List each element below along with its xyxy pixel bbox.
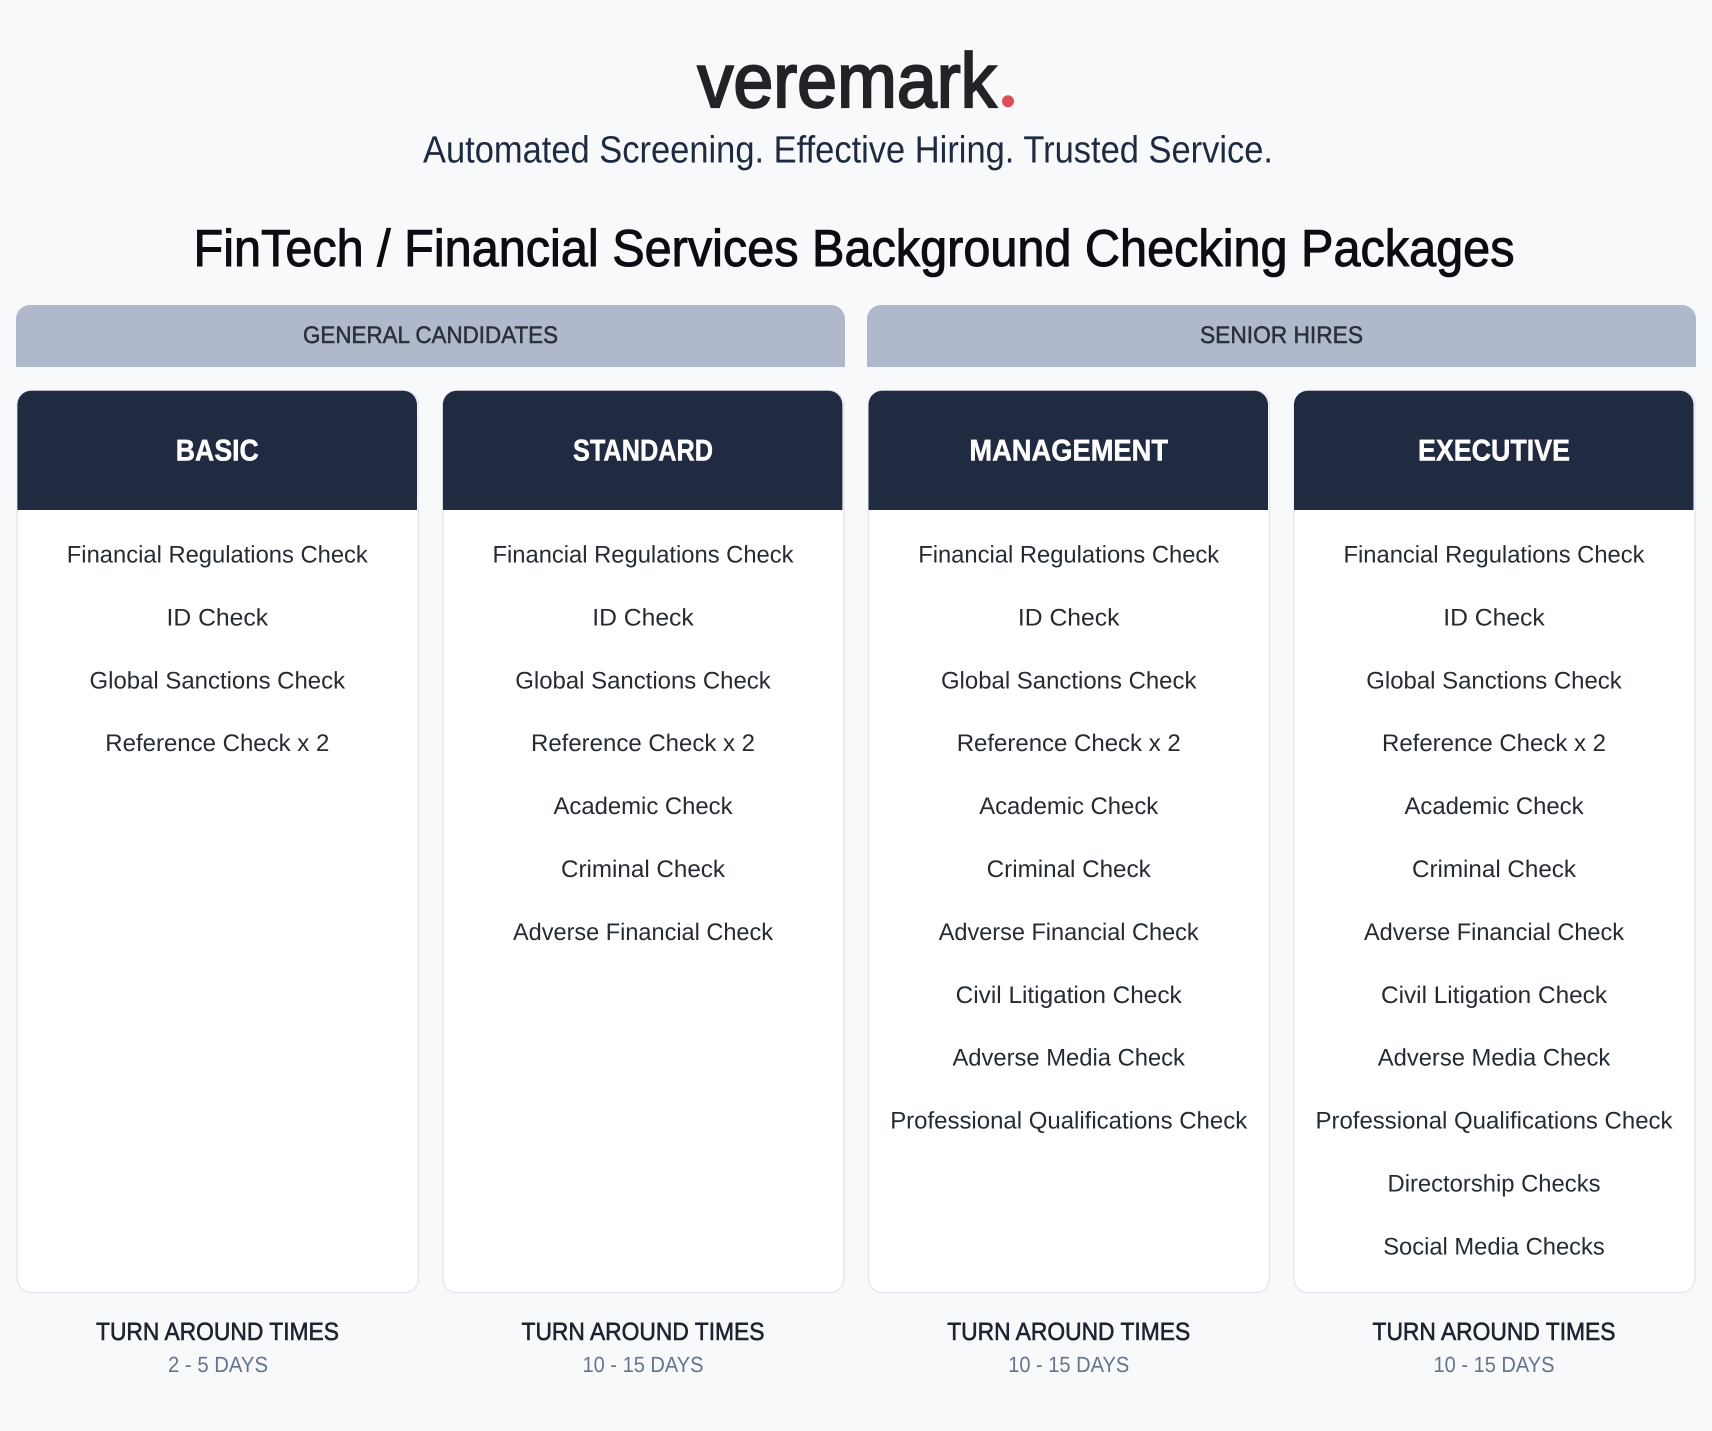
executive check list: Financial Regulations Check [1344,542,1645,568]
standard check list: Global Sanctions Check [515,667,772,694]
executive check list: ID Check [1443,604,1546,631]
banner: general candidates: GENERAL CANDIDATES [303,322,558,349]
panel: executive package [1294,391,1695,1293]
banner: senior hires [867,305,1696,367]
turnaround: standard [522,1318,764,1377]
standard check list: Academic Check [554,793,733,820]
basic check list: Financial Regulations Check [67,542,369,568]
executive check list: Criminal Check [1412,856,1577,883]
turnaround: executive [1372,1318,1616,1377]
basic header [17,391,417,510]
executive header [1294,391,1694,510]
standard header [443,391,842,510]
title: FinTech / Financial Services Background Checking Packages [194,220,1514,278]
executive check list [1316,542,1673,1260]
management check list: Global Sanctions Check [941,667,1197,694]
tagline: Automated Screening. Effective Hiring. Trusted Service. [423,130,1273,172]
basic check list: Global Sanctions Check [90,667,346,694]
management check list: Professional Qualifications Check [890,1108,1248,1135]
turnaround: executive: 10 - 15 DAYS [1434,1352,1554,1377]
management check list [890,542,1248,1135]
executive check list: Professional Qualifications Check [1316,1108,1673,1135]
panel: basic package [17,391,418,1293]
standard check list: Financial Regulations Check [492,542,794,568]
basic check list: ID Check [167,604,269,631]
turnaround: basic: 2 - 5 DAYS [168,1352,268,1377]
executive check list: Social Media Checks [1383,1233,1605,1260]
banner: general candidates [16,305,845,367]
panel: standard package [443,391,844,1293]
executive check list: Global Sanctions Check [1366,667,1623,694]
management check list: Reference Check x 2 [957,730,1181,757]
turnaround: executive: TURN AROUND TIMES [1372,1318,1616,1346]
executive check list: Reference Check x 2 [1382,730,1606,757]
standard check list: Adverse Financial Check [513,919,774,946]
management header: MANAGEMENT [969,434,1168,468]
executive check list: Adverse Media Check [1378,1045,1611,1072]
management check list: Adverse Media Check [952,1045,1186,1072]
management header [868,391,1268,510]
executive check list: Civil Litigation Check [1381,982,1608,1009]
executive check list: Academic Check [1404,793,1584,820]
standard check list [492,542,794,946]
executive check list: Directorship Checks [1388,1170,1600,1198]
standard check list: Criminal Check [561,856,726,883]
turnaround: basic [96,1318,339,1377]
basic header: BASIC [176,434,259,468]
management check list: Civil Litigation Check [956,982,1183,1009]
management check list: Academic Check [979,793,1159,820]
turnaround: standard: TURN AROUND TIMES [522,1318,764,1346]
panel: management package [868,391,1269,1293]
management check list: Criminal Check [987,856,1152,883]
management check list: Adverse Financial Check [939,919,1200,946]
turnaround: standard: 10 - 15 DAYS [582,1352,704,1377]
basic check list: Reference Check x 2 [105,730,329,757]
basic check list [67,542,369,757]
management check list: ID Check [1018,604,1120,631]
executive check list: Adverse Financial Check [1364,919,1625,946]
executive header: EXECUTIVE [1418,434,1570,468]
standard check list: ID Check [592,604,695,631]
standard check list: Reference Check x 2 [531,730,755,757]
turnaround: management [947,1318,1190,1377]
standard header: STANDARD [573,434,713,468]
management check list: Financial Regulations Check [918,542,1220,568]
logo: veremark: veremark [698,38,997,124]
turnaround: basic: TURN AROUND TIMES [96,1318,339,1346]
banner: senior hires: SENIOR HIRES [1200,322,1363,349]
turnaround: management: TURN AROUND TIMES [947,1318,1190,1346]
turnaround: management: 10 - 15 DAYS [1008,1352,1129,1377]
